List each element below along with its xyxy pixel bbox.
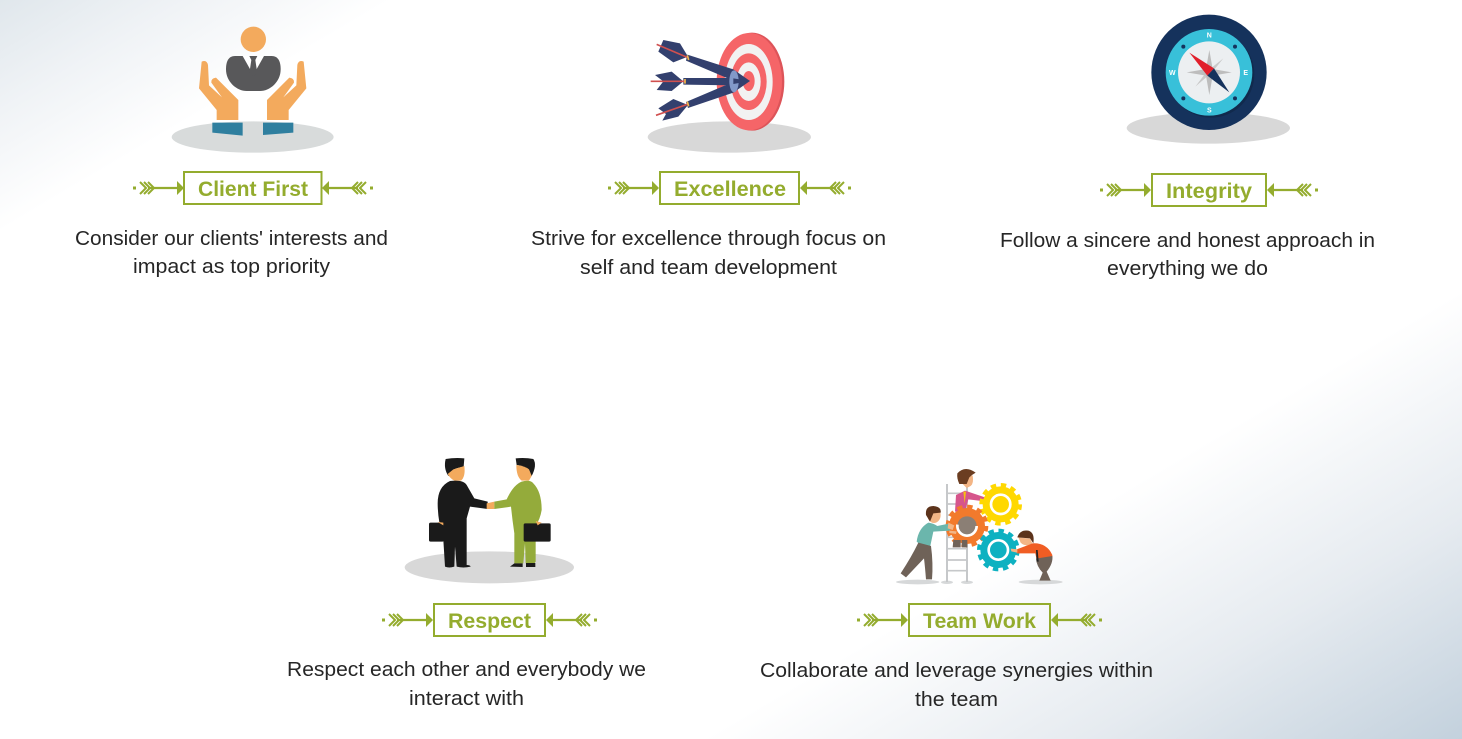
arrow: right ornament	[322, 181, 373, 195]
panel: Excellence	[531, 33, 886, 279]
heading: Team Work	[923, 610, 1036, 633]
arrow: left ornament	[857, 613, 908, 627]
icon: compass: N	[1207, 33, 1212, 40]
icon: hands holding client	[172, 27, 334, 153]
arrow: right ornament	[546, 613, 597, 627]
icon: compass: E	[1243, 70, 1248, 77]
icon: compass: W	[1169, 70, 1176, 77]
panel: Integrity	[1000, 15, 1375, 280]
description	[760, 660, 1153, 711]
description: everything we do	[1107, 258, 1268, 280]
description	[1000, 230, 1375, 280]
description: Strive for excellence through focus on	[531, 228, 886, 250]
icon: compass	[1127, 15, 1290, 144]
panel: Team Work	[760, 469, 1153, 711]
description: interact with	[409, 688, 524, 710]
icon: compass: S	[1207, 108, 1212, 115]
description: Consider our clients' interests and	[75, 228, 388, 250]
heading box	[909, 604, 1050, 636]
heading box	[184, 172, 322, 204]
description	[287, 659, 646, 710]
icon: target with darts	[648, 33, 811, 153]
arrow: right ornament	[800, 181, 851, 195]
arrow: right ornament	[1051, 613, 1102, 627]
arrow: left ornament	[382, 613, 433, 627]
description: the team	[915, 689, 998, 711]
arrow: left ornament	[608, 181, 659, 195]
icon: handshake	[405, 458, 574, 583]
heading: Excellence	[674, 178, 786, 201]
panel: Respect	[287, 458, 646, 710]
arrow: left ornament	[133, 181, 184, 195]
arrow: right ornament	[1267, 183, 1318, 197]
heading box	[660, 172, 799, 204]
icon: team turning gears	[896, 469, 1063, 584]
heading box	[1152, 174, 1266, 206]
description	[75, 228, 388, 278]
description: impact as top priority	[133, 256, 330, 278]
heading box	[434, 604, 545, 636]
description: Follow a sincere and honest approach in	[1000, 230, 1375, 252]
heading: Integrity	[1166, 180, 1252, 203]
heading: Client First	[198, 178, 308, 201]
arrow: left ornament	[1100, 183, 1151, 197]
description: Collaborate and leverage synergies within	[760, 660, 1153, 682]
description: self and team development	[580, 257, 837, 279]
heading: Respect	[448, 610, 531, 633]
description	[531, 228, 886, 279]
description: Respect each other and everybody we	[287, 659, 646, 681]
panel: Client First	[75, 27, 388, 278]
